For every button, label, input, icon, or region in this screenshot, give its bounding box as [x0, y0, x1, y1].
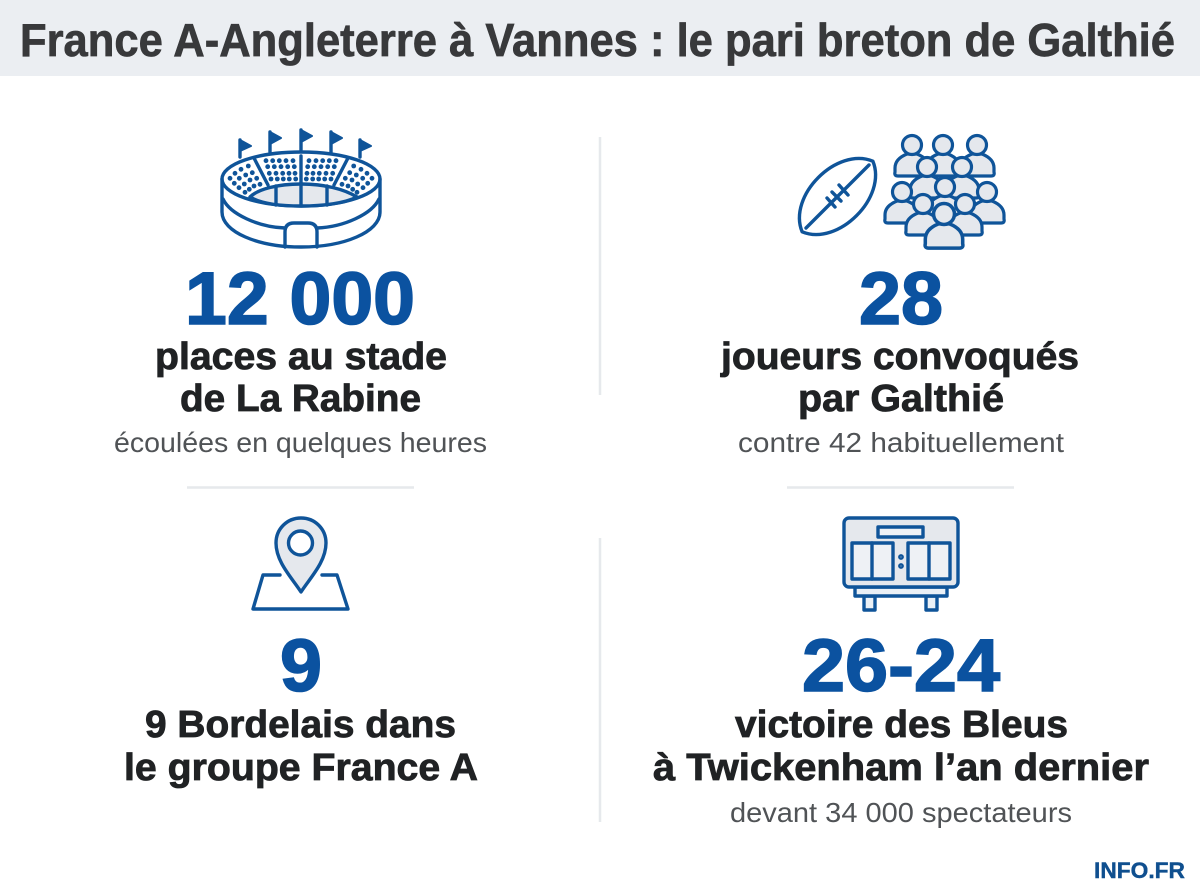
- label: 9 Bordelais dans: [145, 704, 456, 746]
- big number: 28: [859, 257, 943, 340]
- header band: [0, 0, 1200, 76]
- panel: stade: [114, 130, 487, 458]
- panel: bordelais: [124, 518, 478, 789]
- subtext: écoulées en quelques heures: [114, 427, 487, 458]
- icon: stadium: [222, 130, 380, 247]
- subtext: contre 42 habituellement: [738, 427, 1064, 458]
- big number: 12 000: [185, 257, 415, 340]
- label: joueurs convoqués: [720, 336, 1079, 378]
- label line 2: le groupe France A: [124, 747, 478, 789]
- icon: map pin: [253, 518, 348, 609]
- label: places au stade: [155, 336, 447, 378]
- big number: 9: [280, 624, 322, 707]
- icon: rugby ball: [783, 142, 892, 251]
- icon: crowd: [885, 136, 1004, 248]
- label line 2: par Galthié: [798, 378, 1004, 420]
- label: victoire des Bleus: [735, 704, 1068, 746]
- label line 2: à Twickenham l’an dernier: [653, 747, 1149, 789]
- source logo: INFO.FR: [1094, 858, 1185, 883]
- panel: victoire: [653, 518, 1149, 828]
- big number: 26-24: [802, 624, 1000, 707]
- label line 2: de La Rabine: [180, 378, 421, 420]
- icon: scoreboard: [844, 518, 958, 610]
- subtext: devant 34 000 spectateurs: [730, 797, 1072, 828]
- panel: joueurs: [720, 136, 1079, 458]
